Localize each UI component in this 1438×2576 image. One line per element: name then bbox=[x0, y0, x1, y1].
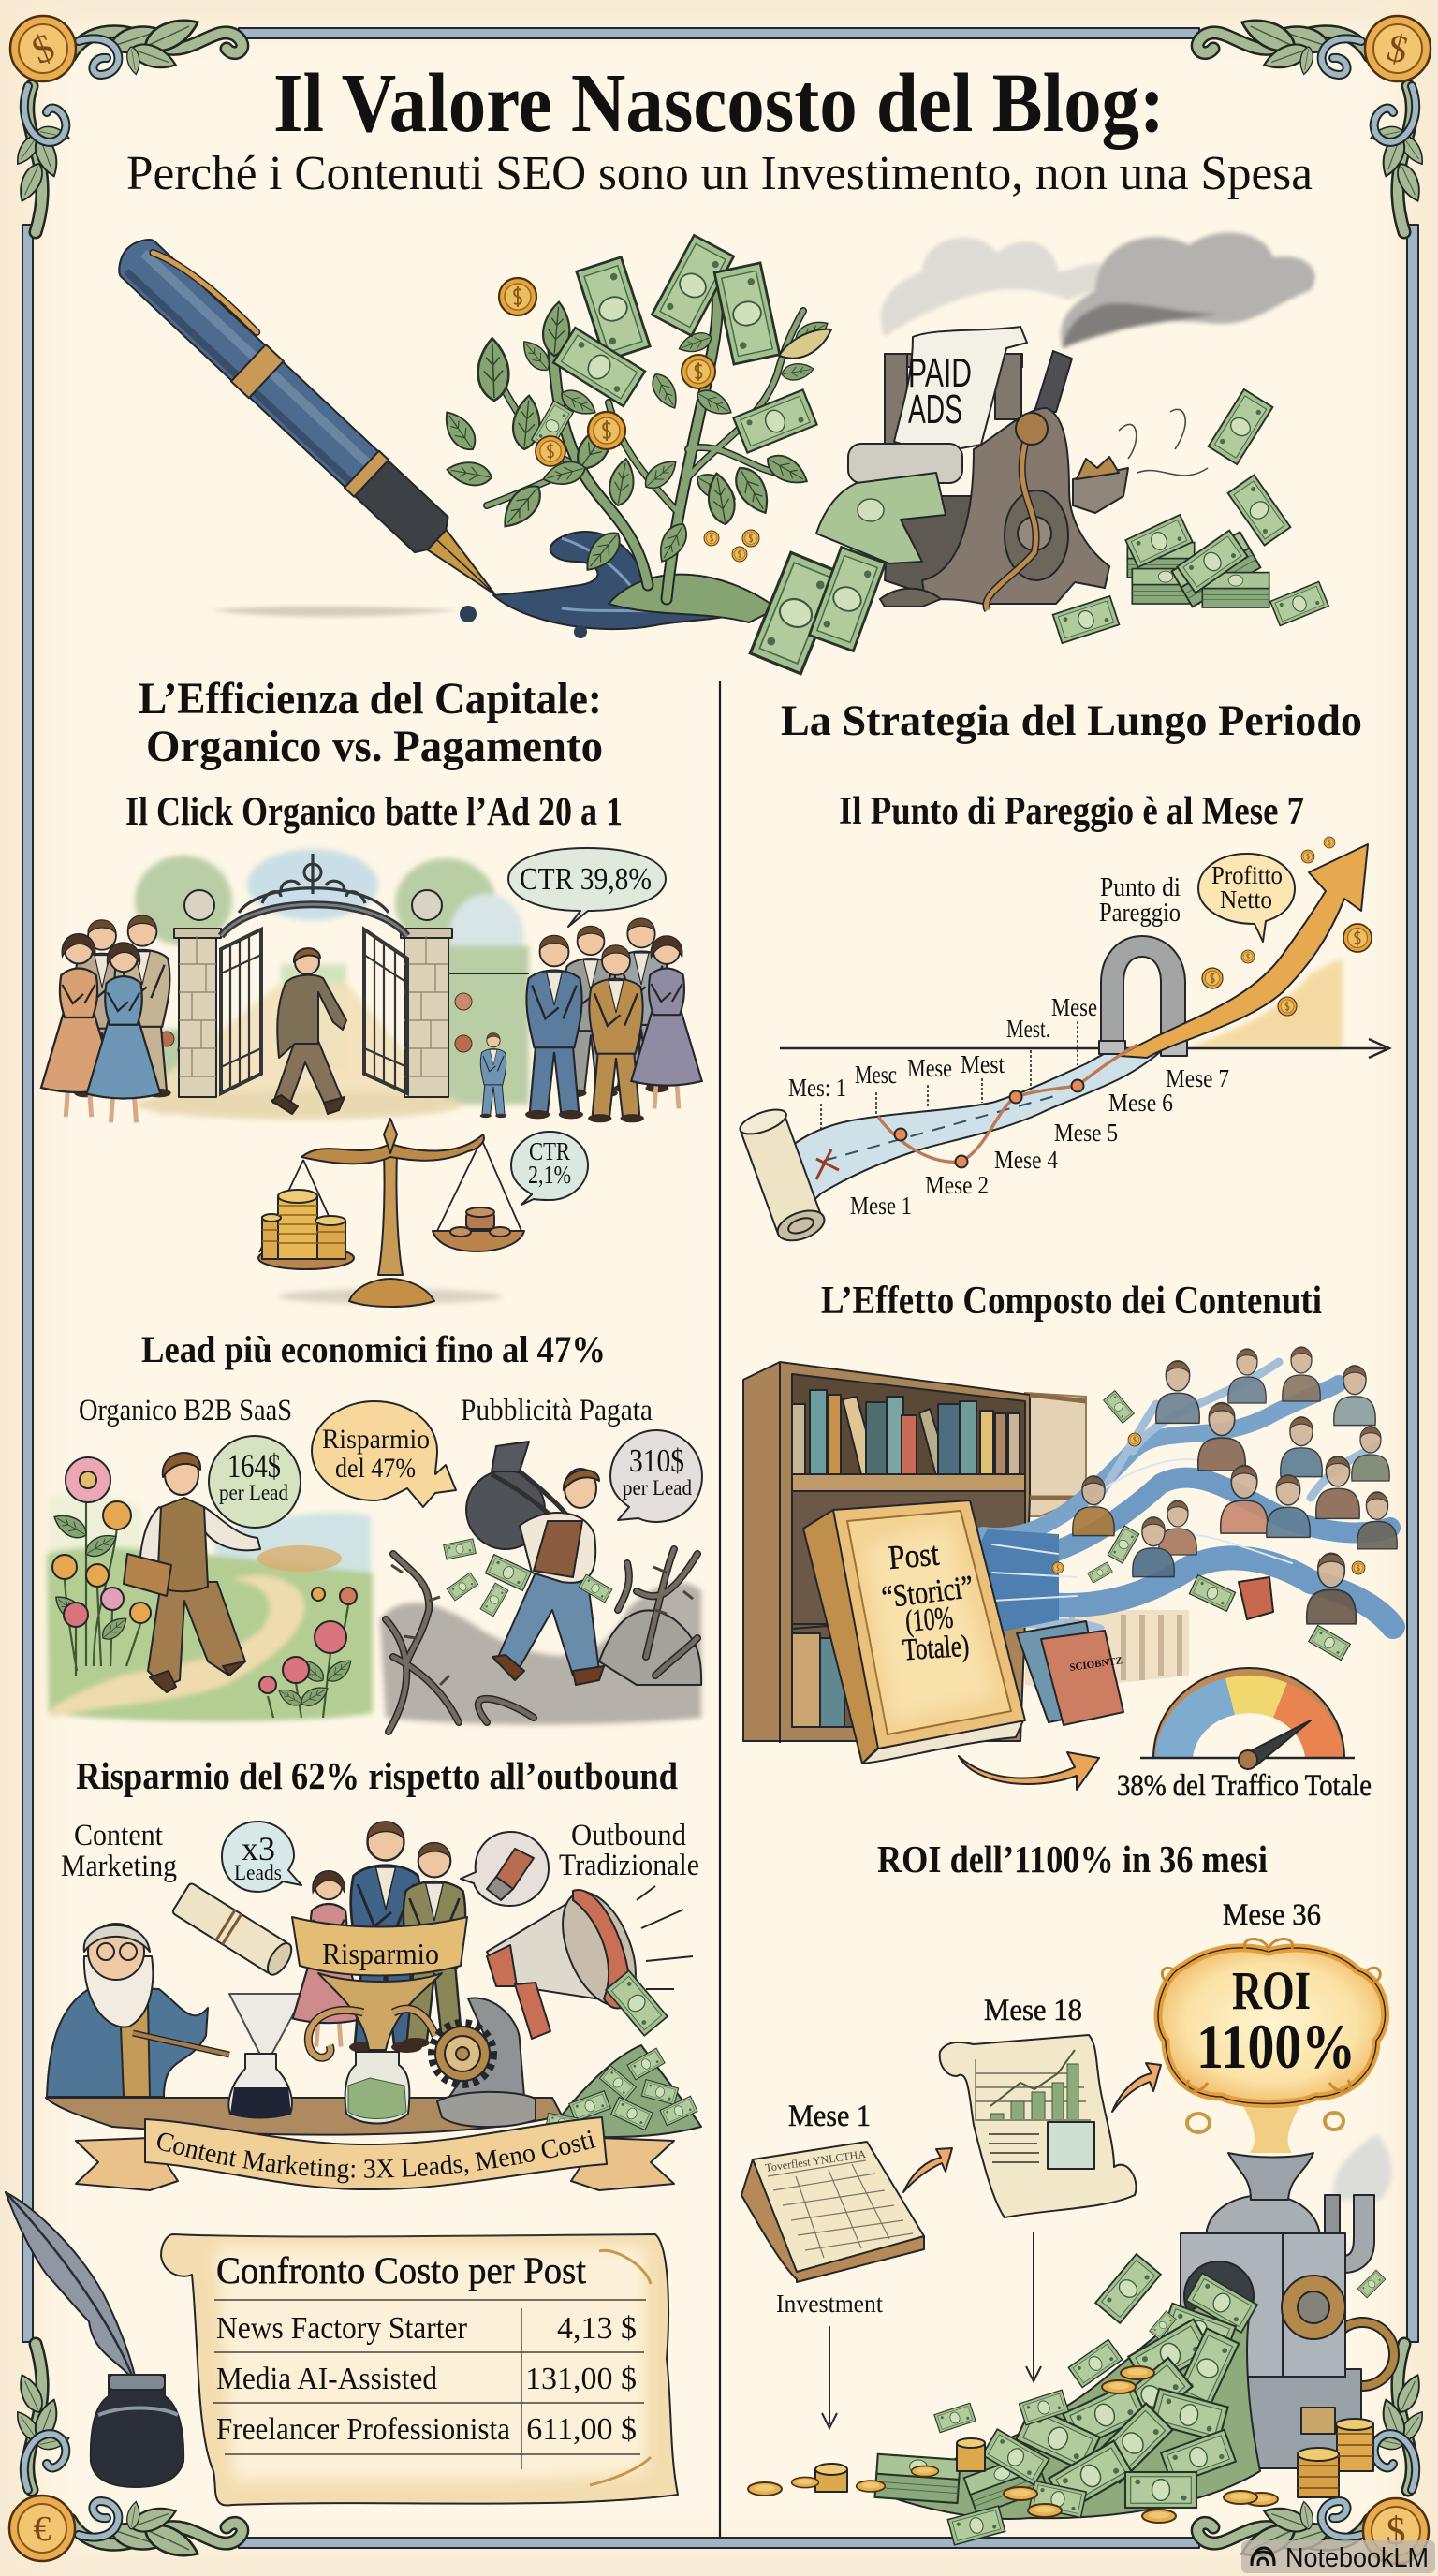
callout: 164$ per lead: per Lead bbox=[219, 1481, 288, 1504]
book label: (10% bbox=[904, 1602, 955, 1639]
hero illustration bbox=[110, 228, 1328, 674]
flowing audience stream bbox=[974, 1362, 1393, 1633]
axis arrow bbox=[780, 1039, 1389, 1058]
callout: net profit bbox=[1198, 854, 1295, 942]
column divider bbox=[719, 681, 721, 2537]
callout: x3 leads bbox=[222, 1822, 301, 1892]
panel: paid thorny path bbox=[380, 1430, 702, 1732]
callout: CTR 2,1%: 2,1% bbox=[528, 1161, 571, 1189]
bookcase bbox=[743, 1362, 1189, 1743]
callout: 310$ per lead: per Lead bbox=[623, 1476, 692, 1500]
megaphone bbox=[487, 1881, 693, 2039]
heading: ROI: ROI dell’1100% in 36 mesi bbox=[877, 1837, 1268, 1881]
row: media AI: Media AI-Assisted bbox=[216, 2362, 437, 2396]
panel: organic garden path bbox=[47, 1436, 373, 1721]
ribbon banner bbox=[75, 2116, 675, 2191]
label: traditional outbound: Outbound bbox=[571, 1819, 686, 1852]
heading: cheaper leads: Lead più economici fino al 47% bbox=[141, 1328, 606, 1370]
month labels: Mese 1 bbox=[850, 1192, 912, 1220]
row: media AI bbox=[216, 2362, 637, 2396]
iron gate bbox=[221, 854, 407, 1093]
callout: CTR 39,8% bbox=[508, 848, 666, 927]
label: 38% of total traffic: 38% del Traffico Totale bbox=[1117, 1769, 1372, 1803]
heading: long term strategy: La Strategia del Lungo Periodo bbox=[781, 696, 1362, 745]
callout: savings 47%: Risparmio bbox=[322, 1424, 430, 1455]
callout: CTR 2,1%: CTR bbox=[529, 1137, 570, 1165]
small books bbox=[1017, 1621, 1123, 1725]
workbench bbox=[46, 2098, 562, 2135]
heading: compound effect: L’Effetto Composto dei Contenuti bbox=[821, 1280, 1322, 1323]
icon: dollar coin bottom right: $ bbox=[1386, 2510, 1406, 2554]
gold funnel with customers bbox=[292, 1822, 467, 2057]
icon: ink splash bbox=[460, 532, 763, 638]
gold coin pan bbox=[258, 1190, 354, 1269]
label: organic B2B SaaS: Organico B2B SaaS bbox=[79, 1394, 292, 1427]
profit wedge bbox=[1187, 959, 1343, 1048]
icon: dollar coin bottom right bbox=[1363, 2498, 1429, 2564]
callout: savings 47% bbox=[312, 1401, 456, 1507]
month labels: Mese 5 bbox=[1054, 1119, 1118, 1147]
arrow: month 1 to month 18 bbox=[903, 2148, 952, 2192]
gold pedestal bbox=[301, 1119, 484, 1307]
month labels bbox=[788, 993, 1229, 1220]
book label bbox=[880, 1535, 976, 1667]
traffic gauge bbox=[1140, 1668, 1355, 1769]
icon: euro coin bottom left: € bbox=[34, 2510, 51, 2549]
large book: historic posts bbox=[803, 1500, 1025, 1764]
gold coins bbox=[1202, 837, 1372, 1016]
label: content marketing: Marketing bbox=[61, 1850, 177, 1883]
arrow: month 18 to month 36 bbox=[1112, 2063, 1161, 2112]
crowd bbox=[41, 915, 702, 1122]
label: traditional outbound: Tradizionale bbox=[559, 1849, 699, 1882]
icon: money stacks and flying bills bbox=[750, 389, 1328, 674]
row: freelancer: Freelancer Professionista bbox=[216, 2412, 510, 2447]
small books: SCIOBNTZ bbox=[1069, 1655, 1123, 1674]
walking visitor bbox=[271, 948, 346, 1114]
ROI growth illustration bbox=[741, 1898, 1394, 2545]
paper label: PAID: PAID bbox=[908, 350, 972, 396]
floating bills and books bbox=[1052, 1391, 1365, 1661]
callout: brush icon bbox=[461, 1832, 549, 1906]
money pile bbox=[872, 2254, 1386, 2545]
paper label: ADS: ADS bbox=[908, 387, 962, 432]
icon: fountain pen bbox=[110, 228, 515, 613]
callout: 164$ per lead bbox=[209, 1436, 301, 1528]
callout: 310$ per lead: 310$ bbox=[629, 1442, 684, 1479]
icon: growth report scroll bbox=[940, 2035, 1136, 2217]
icon: money tree bbox=[438, 235, 832, 622]
gate illustration bbox=[41, 848, 702, 1122]
scholar figure bbox=[47, 1924, 229, 2097]
stone pillars bbox=[174, 890, 452, 1097]
icon: ledger book bbox=[741, 2142, 924, 2282]
icon: ledger book: Toverflest YNLCTHA bbox=[764, 2147, 867, 2174]
man with vest bbox=[124, 1453, 260, 1692]
logo: NotebookLM badge bbox=[1241, 2540, 1435, 2573]
orange arrow bbox=[959, 1752, 1099, 1790]
callout: 164$ per lead: 164$ bbox=[227, 1447, 281, 1485]
label: break-even point: Punto di bbox=[1100, 873, 1181, 902]
heading: organic click: Il Click Organico batte l’Ad 20 a 1 bbox=[125, 790, 623, 834]
funnel label: Risparmio bbox=[322, 1937, 439, 1970]
paper roll bbox=[737, 1105, 829, 1246]
label: paid advertising: Pubblicità Pagata bbox=[461, 1394, 653, 1427]
row: news factory bbox=[216, 2311, 637, 2346]
break-even chart bbox=[737, 837, 1389, 1246]
ROI plaque bbox=[1158, 1939, 1386, 2153]
icon: euro coin bottom left bbox=[9, 2496, 75, 2561]
callout: x3 leads: x3 bbox=[242, 1830, 275, 1867]
month labels: Mese 4 bbox=[994, 1146, 1058, 1174]
callout: savings 47%: del 47% bbox=[335, 1453, 416, 1484]
ribbon text: Content Marketing: 3X Leads, Meno Costi bbox=[157, 2130, 596, 2183]
month labels: Mese 18 bbox=[984, 1994, 1082, 2027]
logo: NotebookLM badge: NotebookLM bbox=[1285, 2543, 1429, 2573]
audience figures bbox=[1073, 1347, 1397, 1624]
callout: CTR 39,8%: CTR 39,8% bbox=[520, 862, 652, 897]
road ribbon bbox=[789, 1048, 1160, 1212]
callout: 310$ per lead bbox=[610, 1430, 702, 1522]
funnel workshop illustration bbox=[46, 1822, 701, 2137]
heading: break even: Il Punto di Pareggio è al Mese 7 bbox=[839, 790, 1304, 833]
compound effect illustration bbox=[743, 1347, 1397, 1803]
man carrying sack bbox=[466, 1442, 604, 1685]
heading: capital efficiency bbox=[139, 674, 603, 771]
ROI text: ROI bbox=[1232, 1960, 1311, 2021]
month path markers bbox=[878, 1045, 1137, 1168]
balance scale illustration bbox=[258, 1119, 588, 1307]
money jar bbox=[345, 2052, 409, 2123]
callout: net profit: Profitto bbox=[1211, 861, 1283, 889]
icon: quill and ink bottle bbox=[6, 2192, 183, 2487]
icon: paid ads printing press bbox=[816, 232, 1314, 610]
1100% text: 1100% bbox=[1196, 2011, 1356, 2082]
month labels: Mese 7 bbox=[1166, 1064, 1229, 1092]
book label: Totale) bbox=[902, 1630, 970, 1667]
title: Il Valore Nascosto del Blog: bbox=[273, 57, 1165, 150]
gold profit arrow bbox=[1120, 844, 1368, 1058]
icon: dollar coin top left bbox=[10, 16, 76, 81]
book label: Post bbox=[887, 1535, 941, 1576]
heading: capital efficiency: L’Efficienza del Capitale: bbox=[139, 674, 602, 724]
month labels: Mes: 1 bbox=[788, 1074, 846, 1102]
callout: CTR 2,1% bbox=[511, 1132, 588, 1205]
press body bbox=[885, 496, 983, 599]
callout: net profit: Netto bbox=[1220, 886, 1272, 914]
month labels: Mesc bbox=[855, 1061, 897, 1089]
label: break-even point bbox=[1099, 873, 1181, 928]
row: news factory: 4,13 $ bbox=[557, 2311, 637, 2346]
icon: dollar coin top left: $ bbox=[26, 26, 61, 73]
month labels: Mest bbox=[961, 1050, 1005, 1078]
metal machine and gear bbox=[433, 1998, 536, 2127]
month labels: Mese bbox=[907, 1054, 952, 1082]
icon: dollar coin top right: $ bbox=[1383, 26, 1413, 73]
month labels: Mese 1 bbox=[788, 2100, 871, 2133]
money pile bbox=[546, 1970, 701, 2137]
month labels: Mese 2 bbox=[925, 1171, 989, 1199]
row: freelancer: 611,00 $ bbox=[526, 2412, 637, 2447]
press upright frame bbox=[885, 354, 1022, 457]
month labels: Mese 36 bbox=[1223, 1898, 1321, 1932]
icon: dollar coin top right bbox=[1365, 16, 1431, 81]
table heading: Confronto Costo per Post bbox=[216, 2249, 586, 2291]
ink jar bbox=[228, 1994, 304, 2117]
label: investment: Investment bbox=[776, 2290, 883, 2318]
month labels: Mese 6 bbox=[1108, 1089, 1173, 1117]
label: break-even point: Pareggio bbox=[1099, 899, 1181, 928]
label: content marketing bbox=[61, 1819, 177, 1883]
heading: capital efficiency: Organico vs. Pagamento bbox=[146, 722, 603, 771]
month labels bbox=[788, 1898, 1321, 2133]
ROI machine bbox=[1181, 2134, 1394, 2468]
row: media AI: 131,00 $ bbox=[525, 2362, 637, 2396]
label: content marketing: Content bbox=[74, 1819, 163, 1852]
row: news factory: News Factory Starter bbox=[216, 2311, 468, 2346]
book label: “Storici” bbox=[880, 1570, 976, 1616]
paper scroll bbox=[171, 1882, 296, 1979]
month labels: Mese bbox=[1051, 993, 1097, 1021]
subtitle: Perché i Contenuti SEO sono un Investimento, non una Spesa bbox=[126, 147, 1313, 200]
paper sheet bbox=[894, 327, 1027, 453]
month labels: Mest. bbox=[1006, 1015, 1050, 1043]
small coin pan bbox=[433, 1208, 524, 1251]
heading: outbound savings: Risparmio del 62% rispetto all’outbound bbox=[76, 1754, 678, 1797]
callout: x3 leads: Leads bbox=[234, 1861, 282, 1884]
coin stacks bbox=[748, 2366, 1373, 2523]
stone arch bbox=[1099, 936, 1187, 1056]
panel: cost per post table bbox=[161, 2234, 678, 2506]
label: traditional outbound bbox=[559, 1819, 699, 1882]
